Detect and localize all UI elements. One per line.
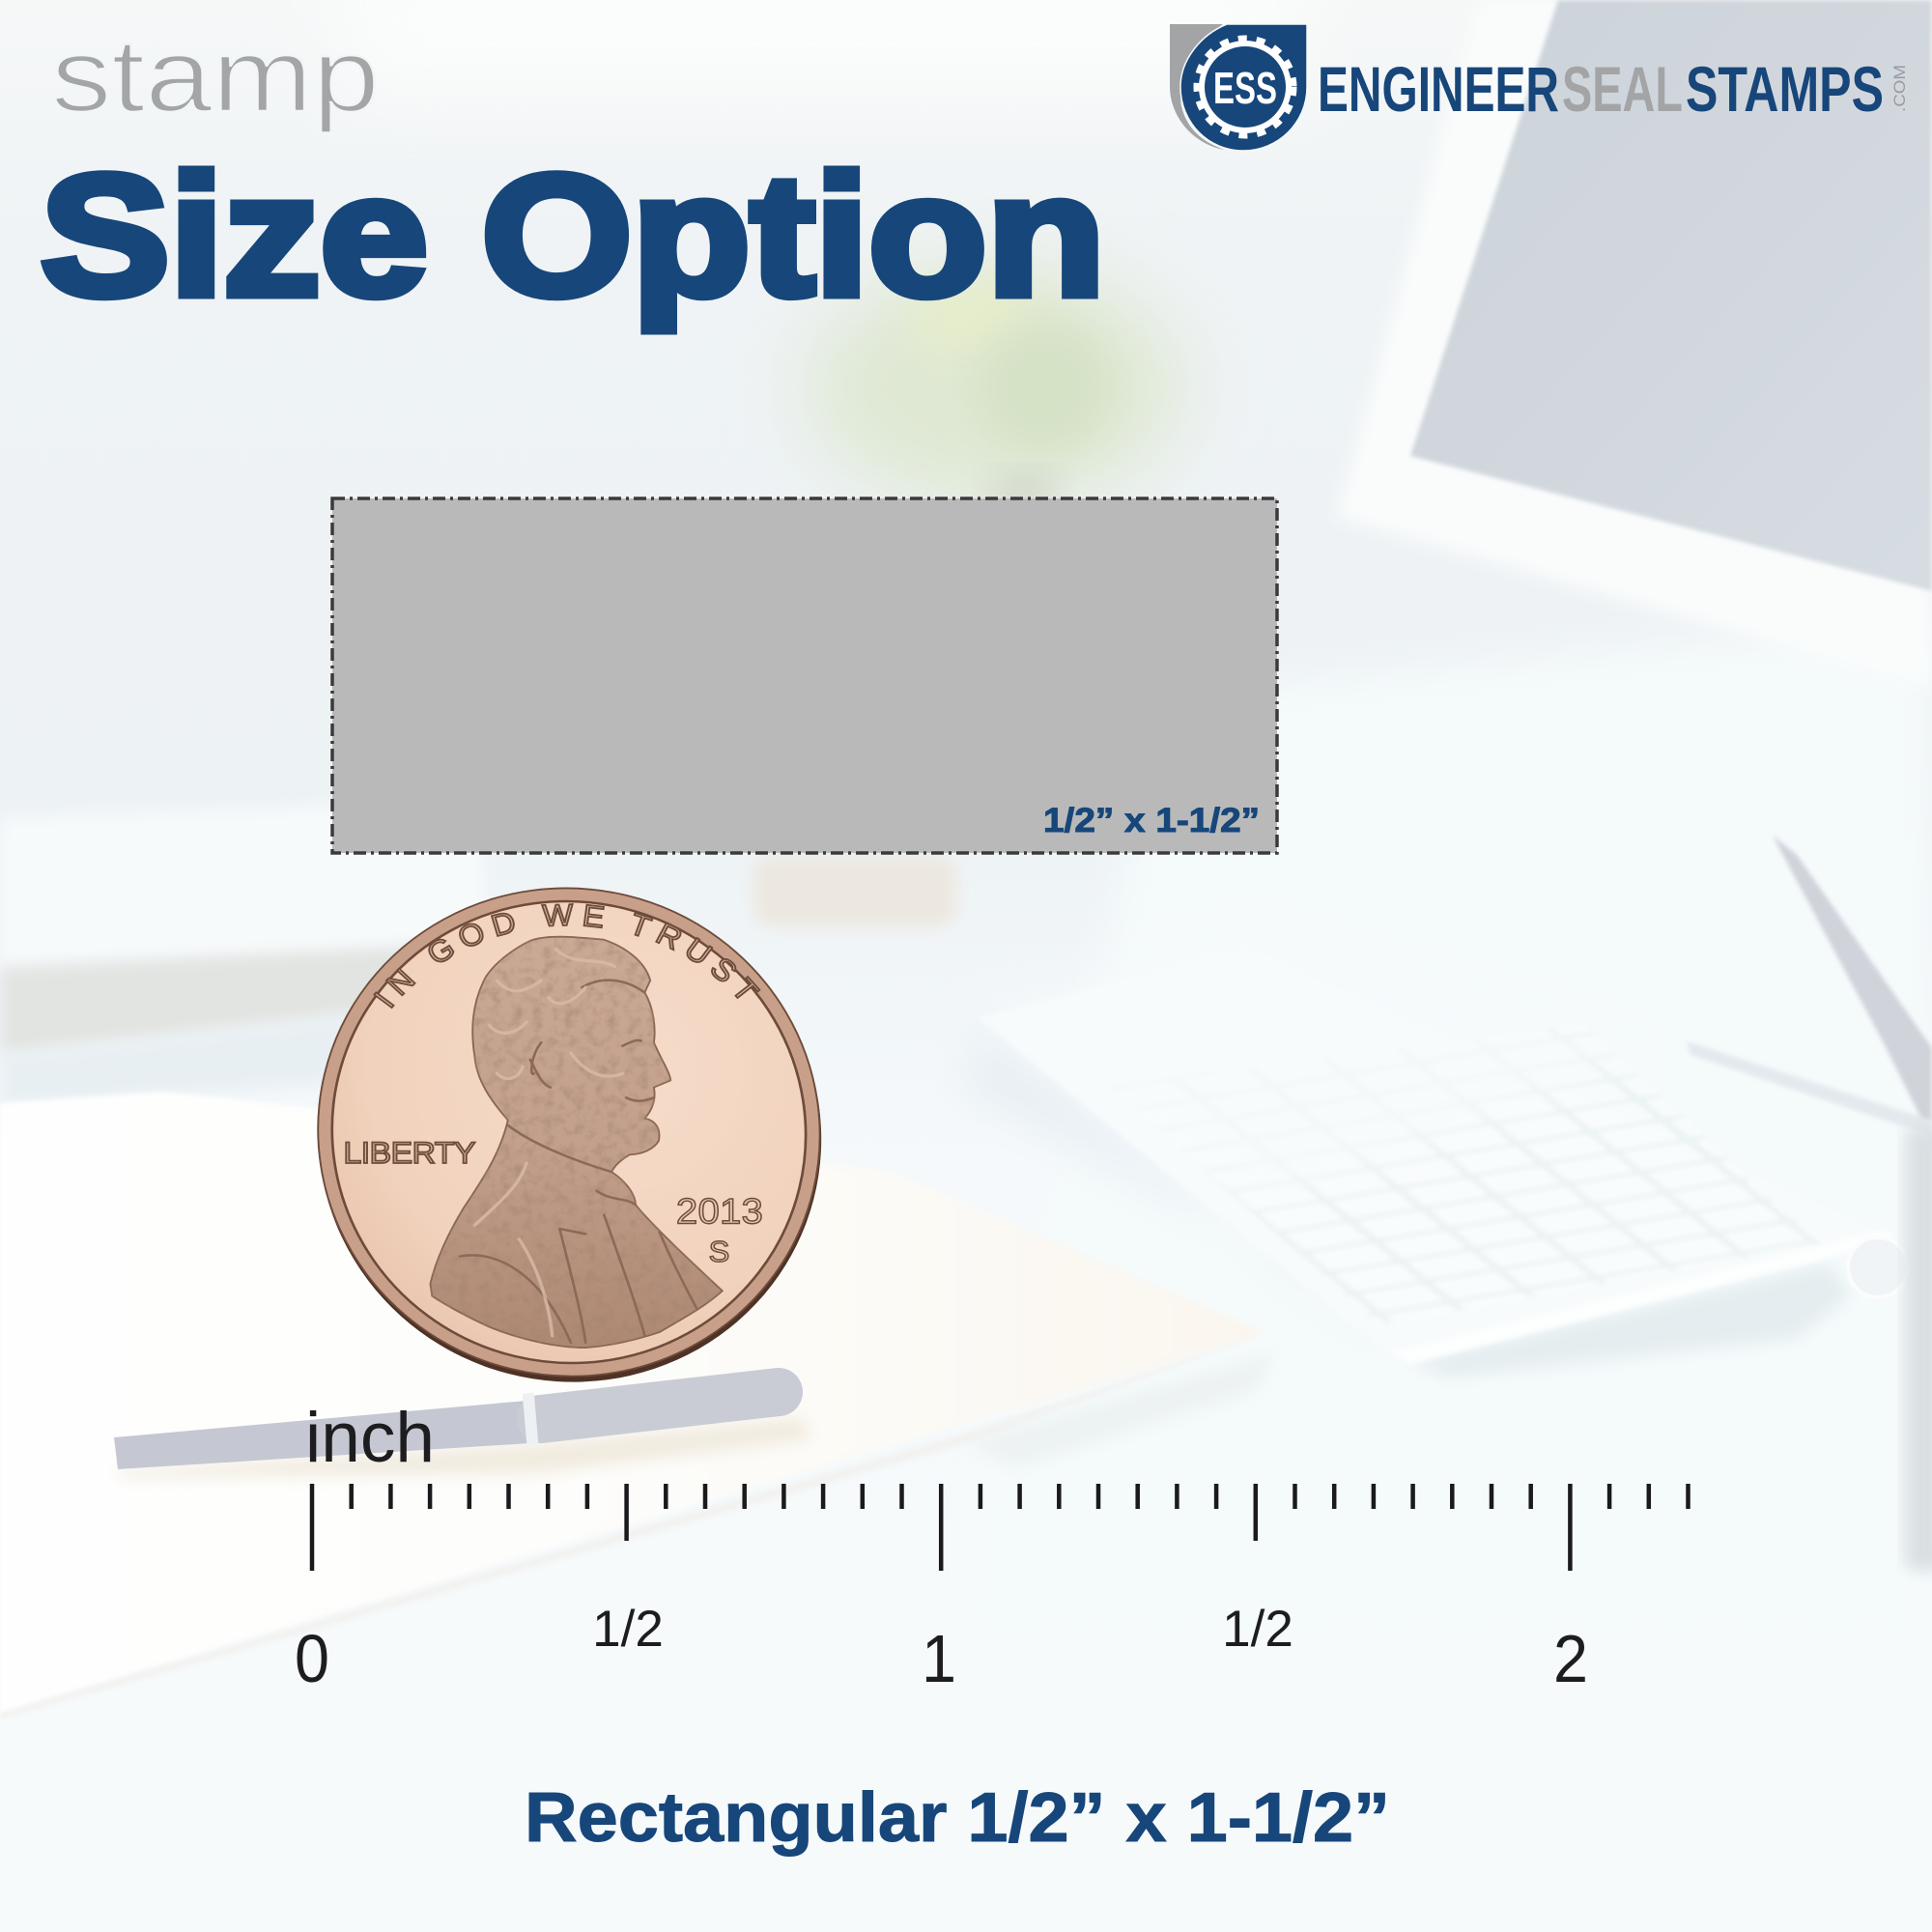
flower pot <box>753 855 956 927</box>
plant <box>807 266 1183 512</box>
ruler numbers: 1 <box>922 1621 956 1696</box>
logo icon: gear shield: ESS <box>1213 63 1277 113</box>
logo wordmark <box>1318 53 1884 125</box>
coin mint mark: S <box>709 1236 729 1268</box>
title: Size Option: Size Option <box>41 139 1105 331</box>
pen <box>114 1392 811 1478</box>
Lincoln portrait <box>430 937 723 1348</box>
penny coin <box>317 887 821 1382</box>
coin motto: IN GOD WE TRUST <box>373 903 761 1009</box>
ruler numbers: 1/2 <box>592 1601 664 1658</box>
coin year: 2013 <box>676 1192 763 1232</box>
ruler unit label: inch <box>305 1399 435 1477</box>
coin rim <box>284 858 854 1406</box>
stamp impression area <box>332 498 1277 853</box>
logo: Engineer Seal Stamps <box>1170 24 1909 151</box>
ruler <box>295 1399 1689 1696</box>
size label on stamp: 1/2” x 1-1/2” <box>1043 802 1260 839</box>
logo wordmark: ENGINEER <box>1318 53 1559 125</box>
portrait contour details <box>460 980 696 1343</box>
coin edge shadow <box>284 859 855 1412</box>
desk <box>966 618 1932 1642</box>
coin field <box>300 872 838 1392</box>
keyboard <box>966 937 1908 1377</box>
logo .COM: .COM <box>1890 65 1909 112</box>
cup <box>1905 1126 1932 1571</box>
ruler numbers: 0 <box>295 1621 329 1696</box>
ruler numbers <box>295 1601 1588 1696</box>
monitor screen <box>1410 0 1932 591</box>
logo icon: gear shield <box>1170 24 1307 151</box>
paper sheet <box>0 1092 1275 1719</box>
coin LIBERTY: LIBERTY <box>343 1136 475 1170</box>
caption: size name: Rectangular 1/2” x 1-1/2” <box>525 1779 1390 1857</box>
monitor bezel <box>1337 0 1932 690</box>
logo wordmark: SEAL <box>1562 53 1683 125</box>
ruler numbers: 2 <box>1553 1621 1588 1696</box>
label: stamp: stamp <box>51 16 380 133</box>
window sill <box>0 802 502 1106</box>
ruler numbers: 1/2 <box>1222 1601 1293 1658</box>
pencils <box>1687 836 1932 1140</box>
ruler ticks <box>312 1484 1689 1571</box>
